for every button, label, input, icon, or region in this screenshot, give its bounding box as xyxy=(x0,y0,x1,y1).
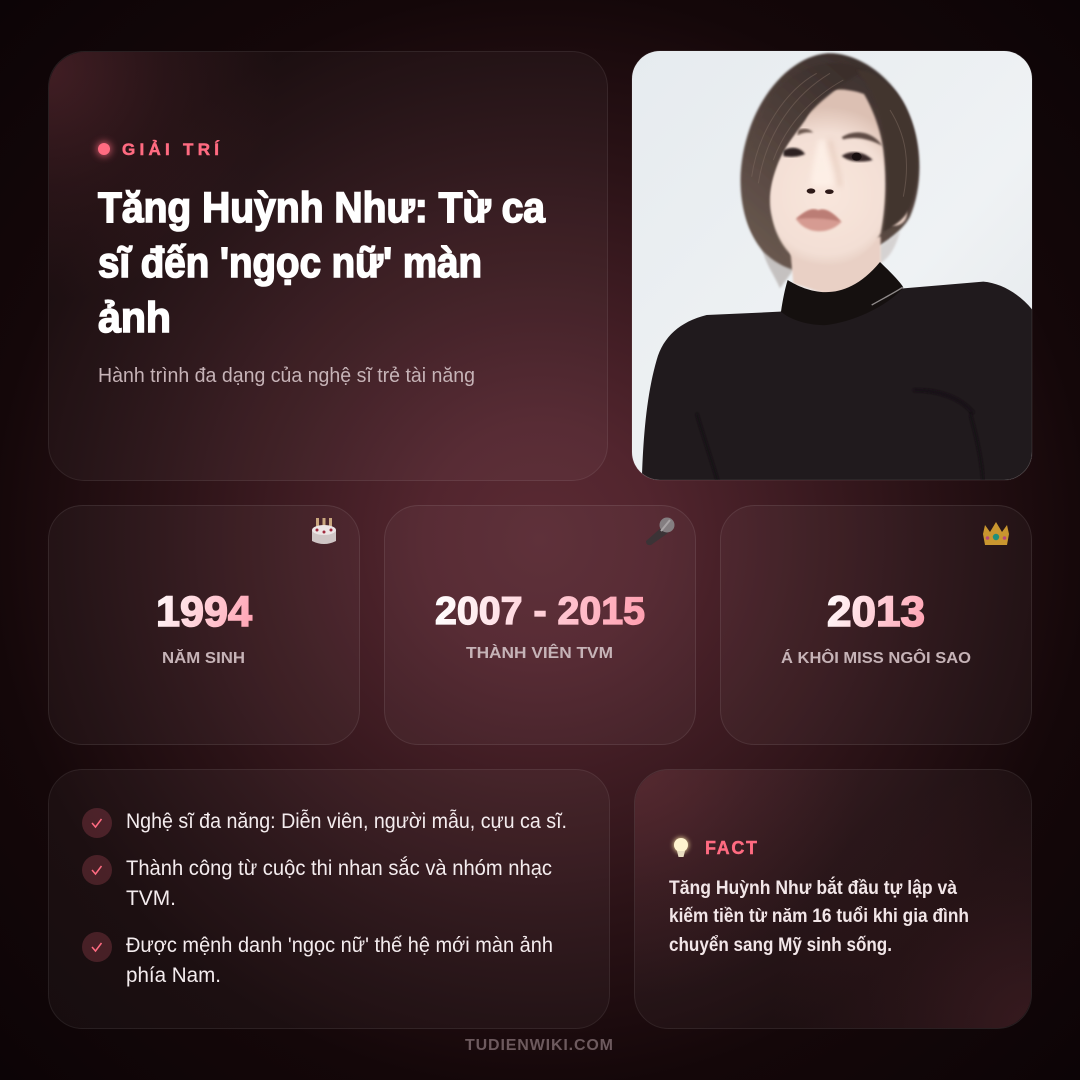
heading: ảnh xyxy=(98,294,171,342)
fact label: FACT xyxy=(705,838,757,858)
list item 3 xyxy=(82,932,553,987)
panel: title card xyxy=(48,52,608,480)
icon: crown xyxy=(983,522,1009,545)
hair back xyxy=(741,53,919,270)
list item 1: Nghệ sĩ đa năng: Diễn viên, người mẫu, cựu ca sĩ. xyxy=(126,810,567,833)
sweater folds xyxy=(913,390,973,413)
panel: stat TVM member xyxy=(384,506,696,744)
number: 2007 - 2015 xyxy=(435,590,645,633)
heading: sĩ đến 'ngọc nữ' màn xyxy=(98,239,482,287)
label: NĂM SINH xyxy=(162,648,245,667)
list item 2 xyxy=(82,855,552,910)
icon: cake xyxy=(312,518,336,544)
face xyxy=(770,89,885,265)
fact text: Tăng Huỳnh Như bắt đầu tự lập và xyxy=(669,877,957,899)
category tag: GIẢI TRÍ xyxy=(122,140,220,159)
neck xyxy=(790,237,881,300)
fact text: kiếm tiền từ năm 16 tuổi khi gia đình xyxy=(669,906,969,927)
eyes xyxy=(783,148,805,157)
side bang xyxy=(746,64,840,238)
ear xyxy=(892,211,908,228)
panel: portrait photo xyxy=(632,50,1032,480)
fact text xyxy=(669,877,969,956)
label: THÀNH VIÊN TVM xyxy=(466,643,613,662)
subtitle: Hành trình đa dạng của nghệ sĩ trẻ tài năng xyxy=(98,365,475,387)
hair wisps xyxy=(762,250,792,288)
list item 2: Thành công từ cuộc thi nhan sắc và nhóm nhạc xyxy=(126,857,552,880)
footer source: TUDIENWIKI.COM xyxy=(465,1037,613,1054)
hair strands xyxy=(752,73,907,197)
nostrils xyxy=(807,188,815,194)
right hair section xyxy=(882,84,920,231)
turtleneck xyxy=(781,262,903,325)
icon: microphone xyxy=(646,518,674,545)
panel: stat beauty title xyxy=(720,506,1032,744)
brows xyxy=(842,132,883,146)
list item 1 xyxy=(82,808,567,838)
heading: Tăng Huỳnh Như: Từ ca xyxy=(98,184,546,232)
number: 1994 xyxy=(156,588,252,636)
icon: light bulb xyxy=(673,837,689,857)
list item 3: Được mệnh danh 'ngọc nữ' thế hệ mới màn ảnh xyxy=(126,934,553,957)
panel: stat birth year xyxy=(48,506,360,744)
heading xyxy=(98,184,546,342)
label: Á KHÔI MISS NGÔI SAO xyxy=(781,648,971,667)
panel: fact card xyxy=(634,770,1032,1028)
nose xyxy=(812,141,832,185)
panel: highlights list xyxy=(48,770,610,1028)
fact text: chuyển sang Mỹ sinh sống. xyxy=(669,935,892,956)
lips xyxy=(796,210,841,231)
sweater body xyxy=(642,282,1035,487)
number: 2013 xyxy=(827,588,925,636)
list item 2: TVM. xyxy=(126,887,176,910)
list item 3: phía Nam. xyxy=(126,964,221,987)
